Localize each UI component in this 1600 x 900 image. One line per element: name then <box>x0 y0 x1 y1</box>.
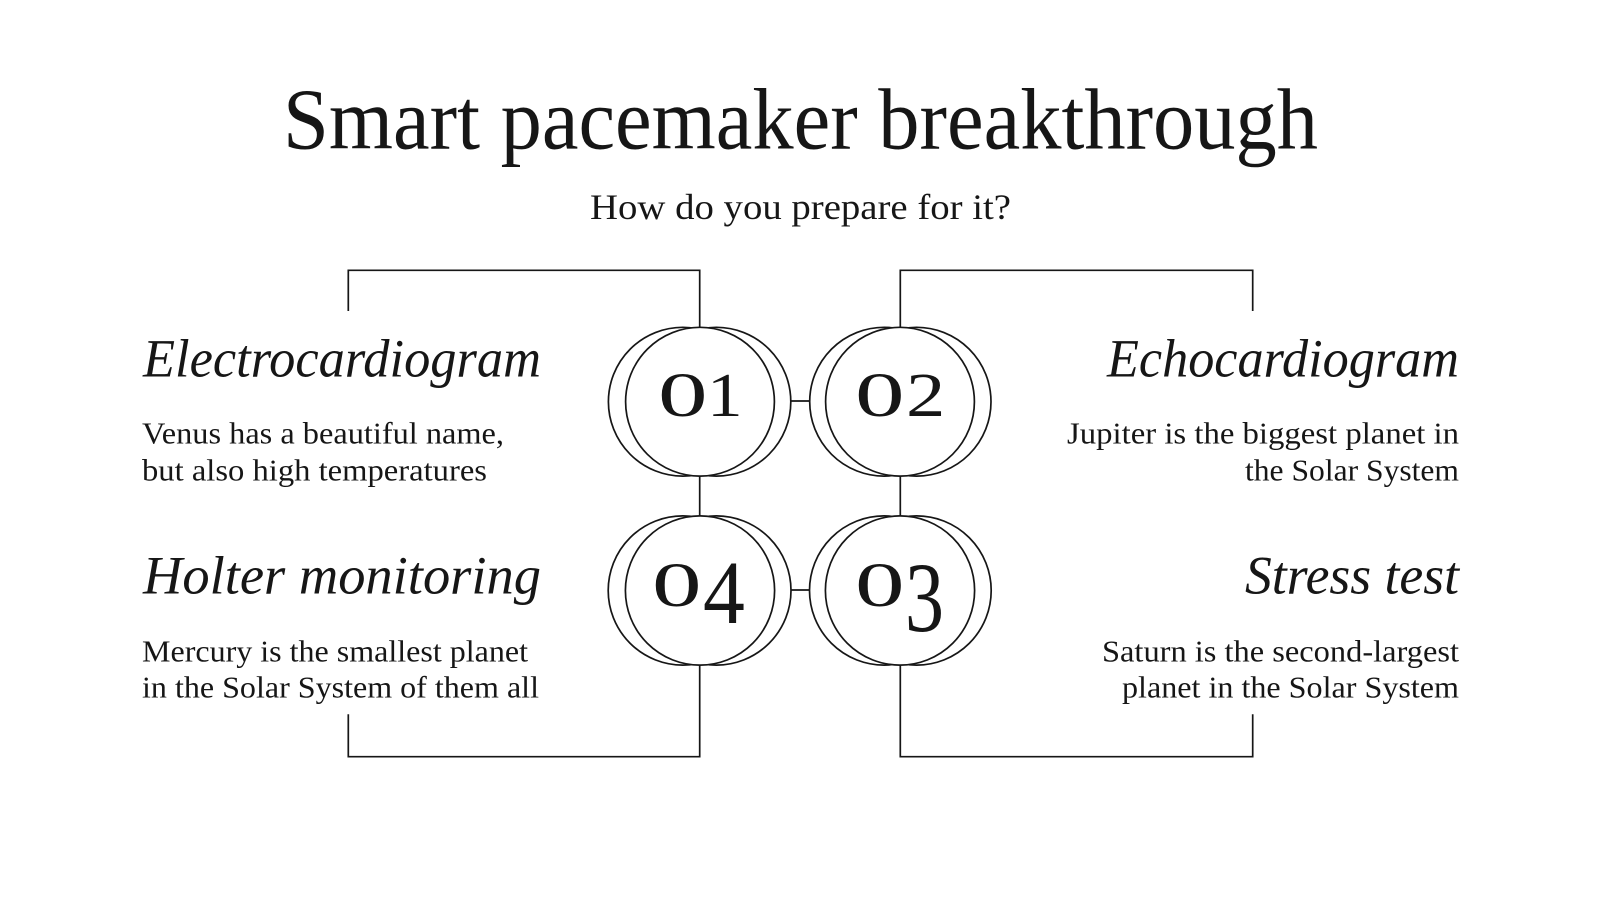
connector: 04 to 03 <box>791 589 810 591</box>
number 01: 1 <box>707 362 742 430</box>
text: Stress test description <box>1102 634 1459 705</box>
panel: Holter monitoring <box>142 545 541 705</box>
connector: 01 to 02 <box>791 400 810 402</box>
text: Stress test description: planet in the Solar System <box>1122 670 1459 705</box>
circle group 01 <box>608 327 791 476</box>
connector: bracket to item 03 <box>900 665 1253 757</box>
circle group 02 <box>810 327 991 476</box>
number 04: 0 <box>652 552 701 620</box>
panel: Echocardiogram <box>1067 329 1460 488</box>
connector: bracket to item 02 <box>900 270 1253 327</box>
text: Holter monitoring description: Mercury is the smallest planet <box>142 634 528 669</box>
number 04: 4 <box>703 544 745 643</box>
connector: bracket to item 04 <box>348 665 700 757</box>
number 03: 0 <box>855 552 905 620</box>
text: Holter monitoring description <box>142 634 539 705</box>
number 03 <box>855 542 944 653</box>
number 02 <box>855 362 945 430</box>
connector: bracket to item 01 <box>348 270 700 327</box>
heading: Stress test: Stress test <box>1245 545 1461 605</box>
title: Smart pacemaker breakthrough <box>283 71 1318 168</box>
heading: Electrocardiogram: Electrocardiogram <box>142 329 541 389</box>
text: Echocardiogram description: Jupiter is the biggest planet in <box>1067 416 1460 451</box>
number 01: 0 <box>658 362 708 430</box>
heading: Echocardiogram: Echocardiogram <box>1106 329 1459 389</box>
circle group 04 <box>608 516 791 665</box>
number 04 <box>652 544 745 643</box>
number 01 <box>658 362 742 430</box>
number 02: 2 <box>906 362 945 430</box>
connector: 02 to 03 <box>899 476 901 516</box>
panel: Electrocardiogram <box>142 329 541 488</box>
panel: Stress test <box>1102 545 1461 705</box>
text: Holter monitoring description: in the Solar System of them all <box>142 670 539 705</box>
circle group 03 <box>810 516 991 665</box>
subtitle: How do you prepare for it? <box>590 187 1011 227</box>
heading: Holter monitoring: Holter monitoring <box>142 545 541 605</box>
connector: 01 to 04 <box>699 476 701 516</box>
text: Echocardiogram description <box>1067 416 1460 488</box>
text: Stress test description: Saturn is the second-largest <box>1102 634 1459 669</box>
text: Echocardiogram description: the Solar System <box>1245 452 1459 488</box>
text: Electrocardiogram description: but also high temperatures <box>142 452 487 488</box>
number 02: 0 <box>855 362 905 430</box>
text: Electrocardiogram description: Venus has a beautiful name, <box>142 416 504 451</box>
number 03: 3 <box>905 542 944 653</box>
text: Electrocardiogram description <box>142 416 504 488</box>
